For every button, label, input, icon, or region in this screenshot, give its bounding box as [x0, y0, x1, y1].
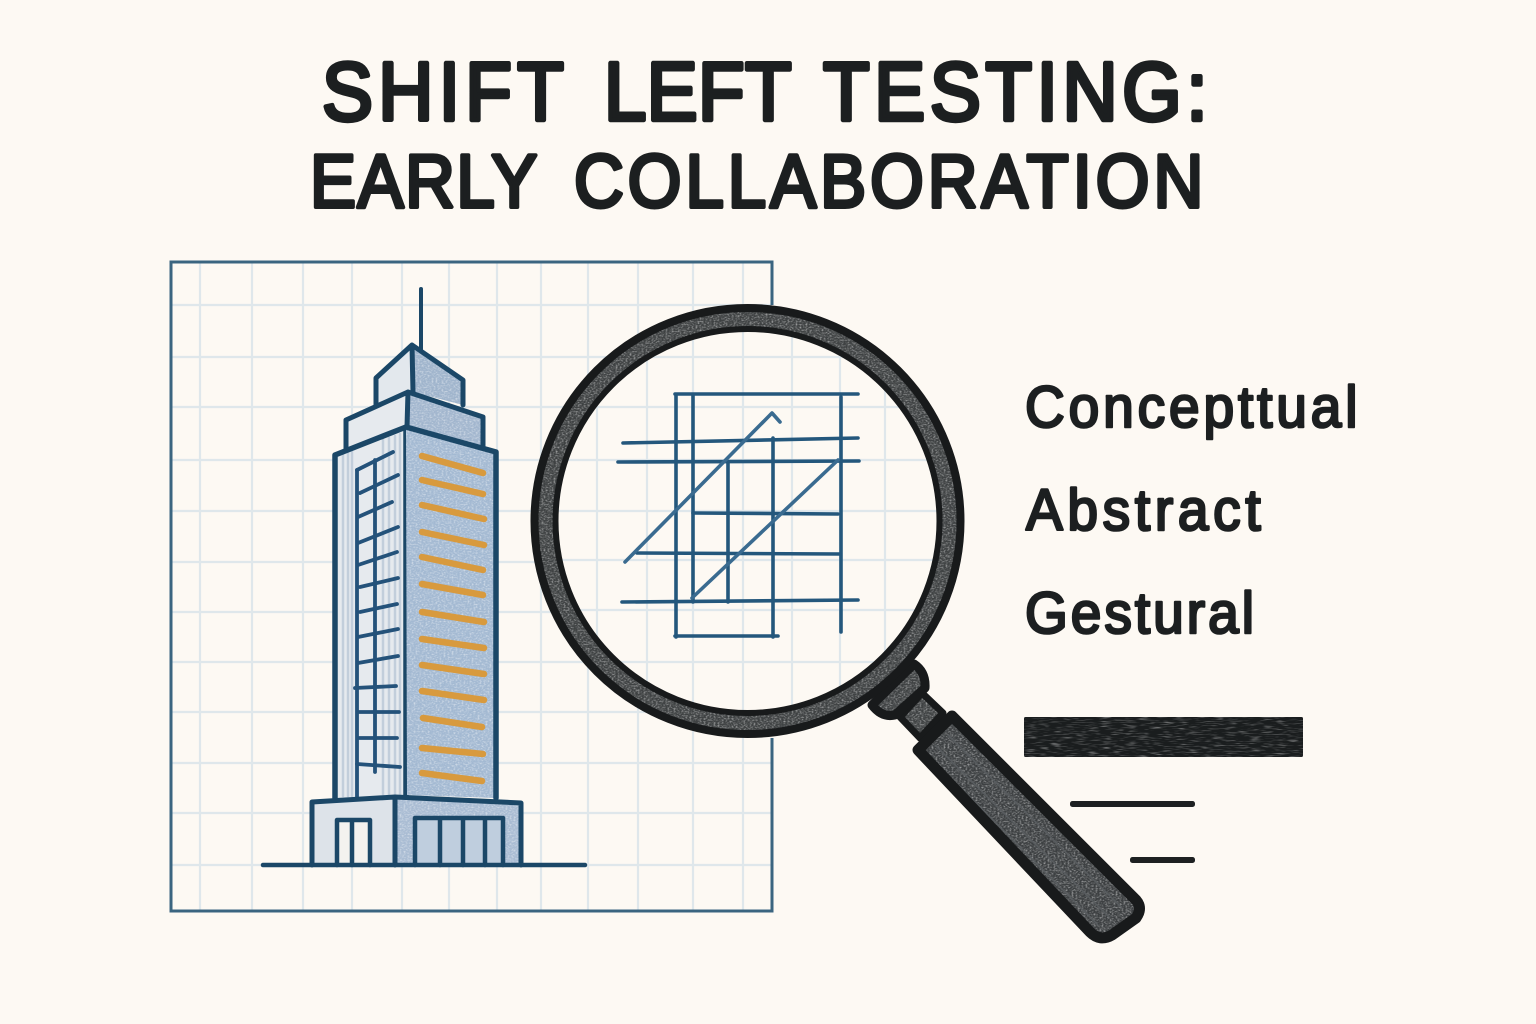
building podium base [312, 797, 521, 865]
title line 1: TESTING: [823, 45, 1208, 138]
title line 2: EARLY [310, 140, 537, 224]
magnifier neck [900, 693, 943, 738]
window grid on left face [355, 452, 400, 797]
building top tier [376, 345, 463, 405]
label: Gestural: Gestural [1025, 581, 1254, 645]
title line 1: LEFT [604, 45, 792, 138]
magnifier collar [872, 664, 925, 716]
label: Abstract: Abstract [1026, 478, 1261, 542]
title [310, 45, 1208, 224]
building spire [419, 289, 423, 350]
building main left face [335, 427, 407, 798]
legend bars [1024, 717, 1303, 863]
orange window bands [422, 456, 484, 781]
medium line [1070, 801, 1195, 807]
magnifier handle [918, 716, 1140, 938]
title line 2: COLLABORATION [574, 140, 1203, 224]
building second tier [346, 392, 483, 450]
icon: skyscraper drawing [263, 289, 585, 865]
infographic canvas [170, 60, 1356, 944]
title line 1: SHIFT [322, 45, 564, 138]
label: Concepttual: Concepttual [1025, 375, 1358, 439]
labels: sketch styles [1025, 375, 1358, 645]
magnifier rim [534, 308, 960, 734]
building main right face [406, 427, 496, 798]
short line [1130, 857, 1195, 863]
thick black bar [1024, 717, 1303, 757]
title line 1 [322, 45, 1208, 138]
magnified sketch lines [618, 394, 859, 637]
panel: blueprint grid sheet [171, 262, 772, 911]
icon: magnifying glass [534, 308, 1140, 938]
magnified lens view [562, 337, 936, 705]
ground line [263, 863, 585, 867]
